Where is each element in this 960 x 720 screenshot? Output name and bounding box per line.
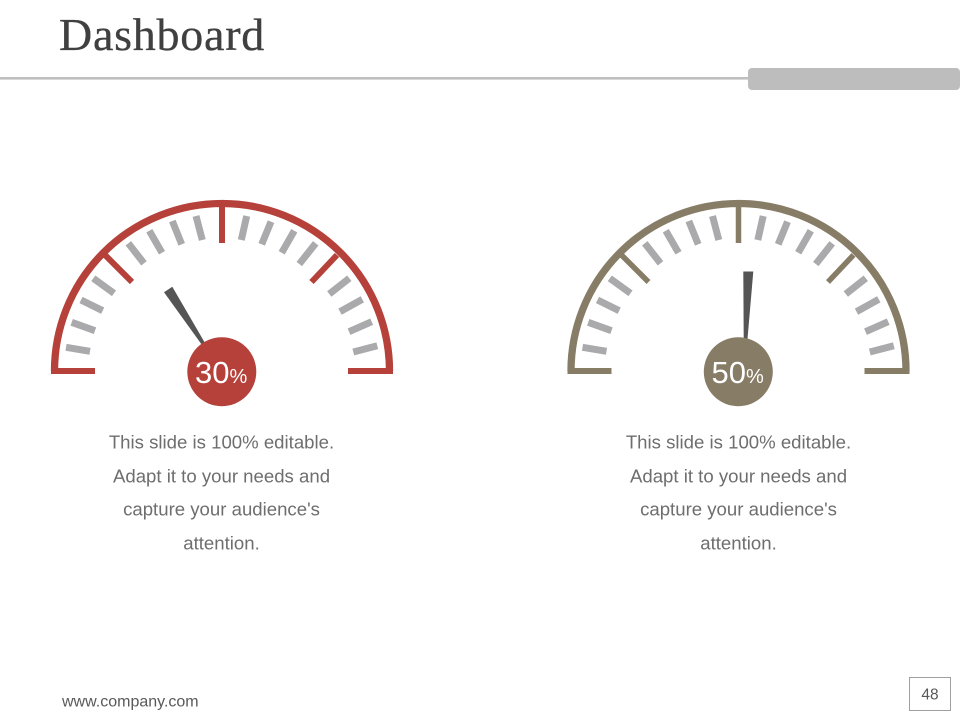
value badge: [187, 337, 256, 406]
title: Dashboard: [59, 9, 265, 60]
needle: [743, 272, 753, 339]
description: right: [626, 432, 851, 554]
major ticks: [622, 203, 854, 282]
description: left: capture your audience's: [123, 499, 320, 520]
page number: 48: [921, 686, 939, 704]
description: left: This slide is 100% editable.: [109, 432, 334, 453]
footer website: www.company.com: [61, 694, 199, 710]
gauge: 30%: [51, 203, 393, 406]
description: left: [109, 432, 334, 554]
description: left: attention.: [183, 533, 260, 554]
description: right: capture your audience's: [640, 499, 837, 520]
value label: 30%: [195, 355, 247, 390]
description: right: Adapt it to your needs and: [630, 466, 847, 487]
gauge arc: [51, 203, 393, 371]
page number: [910, 678, 950, 710]
value badge: [704, 337, 773, 406]
gauge: 50%: [568, 203, 910, 406]
description: right: This slide is 100% editable.: [626, 432, 851, 453]
value label: 50%: [712, 355, 764, 390]
description: left: Adapt it to your needs and: [113, 466, 330, 487]
minor ticks: [66, 216, 377, 352]
header rule and tab: [0, 68, 960, 90]
minor ticks: [582, 216, 894, 352]
description: right: attention.: [700, 533, 777, 554]
gauge arc: [568, 203, 910, 371]
major ticks: [105, 203, 337, 282]
needle: [164, 287, 205, 345]
